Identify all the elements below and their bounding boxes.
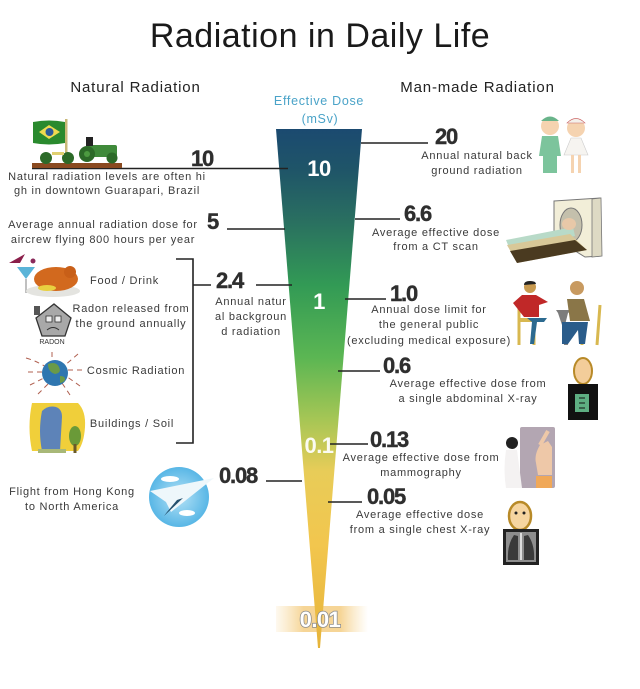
- value: 6.6: 6.6: [404, 201, 432, 226]
- icon: two people at a table: [513, 281, 600, 345]
- item: aircrew: [8, 209, 219, 246]
- band: 0.01: [276, 606, 368, 632]
- icon: doctor and nurse: [539, 116, 588, 173]
- icon: person holding abdominal X-ray: [568, 358, 598, 420]
- label: Buildings / Soil: [90, 418, 174, 430]
- description: gh in downtown Guarapari, Brazil: [14, 185, 200, 197]
- value: 20: 20: [435, 124, 458, 149]
- description: ground radiation: [431, 165, 523, 177]
- item: 0.05: [350, 484, 539, 565]
- description: Annual natural back: [421, 150, 533, 162]
- description: to North America: [25, 501, 119, 513]
- axis heading: effective dose: Effective Dose: [274, 94, 364, 108]
- description: [347, 304, 511, 347]
- axis heading: effective dose: (mSv): [302, 112, 338, 126]
- item: Guarapari, Brazil: [8, 119, 214, 197]
- wedge label: 1: 1: [313, 289, 325, 314]
- description: [343, 452, 499, 479]
- item: 0.6: [383, 353, 598, 420]
- description: [350, 509, 490, 536]
- value: 0.08: 0.08: [219, 463, 258, 488]
- description: mammography: [380, 467, 462, 479]
- dose scale wedge: [276, 129, 368, 648]
- icon: CT scanner: [506, 198, 602, 263]
- item: buildings and soil: [30, 403, 174, 453]
- description: [372, 227, 500, 253]
- icon: cocktail and roast chicken: [9, 254, 80, 297]
- item: 6.6: [372, 198, 602, 263]
- icon: sad radon house: [34, 304, 71, 346]
- description: Flight from Hong Kong: [9, 486, 135, 498]
- item: radon: [34, 303, 189, 346]
- icon: Brazilian flag and tractor: [32, 119, 122, 168]
- item: food and drink: [9, 254, 159, 297]
- item: 0.13: [343, 427, 555, 488]
- description: Average annual radiation dose for: [8, 219, 198, 231]
- description: the ground annually: [76, 318, 186, 330]
- heading: natural radiation: Natural Radiation: [70, 79, 201, 96]
- value: 0.13: 0.13: [370, 427, 409, 452]
- description: [421, 150, 533, 177]
- description: [390, 378, 546, 405]
- item: 1.0: [347, 281, 600, 347]
- description: (excluding medical exposure): [347, 335, 511, 347]
- icon: sad radon house: RADON: [39, 339, 65, 346]
- description: Radon released from: [73, 303, 189, 315]
- wedge label: 0.1: 0.1: [304, 433, 334, 458]
- description: d radiation: [221, 326, 281, 338]
- description: [8, 171, 206, 197]
- item: flight: [9, 463, 258, 527]
- item: annual natural background 2.4: [215, 268, 287, 338]
- icon: mammography: [504, 427, 555, 488]
- description: [8, 219, 198, 246]
- description: Natural radiation levels are often hi: [8, 171, 206, 183]
- value: 2.4: 2.4: [216, 268, 245, 293]
- wedge shape: [276, 129, 362, 648]
- description: [73, 303, 189, 330]
- title: Radiation in Daily Life: [150, 17, 490, 55]
- description: the general public: [379, 319, 479, 331]
- value: 0.6: 0.6: [383, 353, 411, 378]
- description: from a CT scan: [393, 241, 479, 253]
- description: [215, 296, 287, 338]
- heading: man-made radiation: Man-made Radiation: [400, 79, 555, 96]
- description: from a single chest X-ray: [350, 524, 490, 536]
- description: Average effective dose: [356, 509, 484, 521]
- label: Cosmic Radiation: [87, 365, 185, 377]
- value: 5: 5: [207, 209, 219, 234]
- value: 1.0: 1.0: [390, 281, 418, 306]
- description: Average effective dose: [372, 227, 500, 239]
- item: cosmic radiation: [26, 352, 185, 395]
- description: Annual dose limit for: [371, 304, 487, 316]
- description: Annual natur: [215, 296, 287, 308]
- description: aircrew flying 800 hours per year: [11, 234, 195, 246]
- wedge label: 0.01: 0.01: [300, 607, 341, 632]
- leader lines and bracket: [32, 143, 428, 502]
- label: Food / Drink: [90, 275, 159, 287]
- value: 0.05: 0.05: [367, 484, 406, 509]
- description: a single abdominal X-ray: [398, 393, 538, 405]
- description: al backgroun: [215, 311, 287, 323]
- axis heading: effective dose: [274, 94, 364, 126]
- description: Average effective dose from: [390, 378, 546, 390]
- icon: person holding chest X-ray: [503, 502, 539, 565]
- item: 20: [421, 116, 588, 177]
- icon: earth with rays: [26, 352, 82, 395]
- description: [9, 486, 135, 513]
- description: Average effective dose from: [343, 452, 499, 464]
- icon: airplane in sky: [149, 467, 214, 527]
- value: 10: 10: [191, 146, 214, 171]
- icon: building and tree: [30, 403, 85, 453]
- wedge label: 10: 10: [307, 156, 331, 181]
